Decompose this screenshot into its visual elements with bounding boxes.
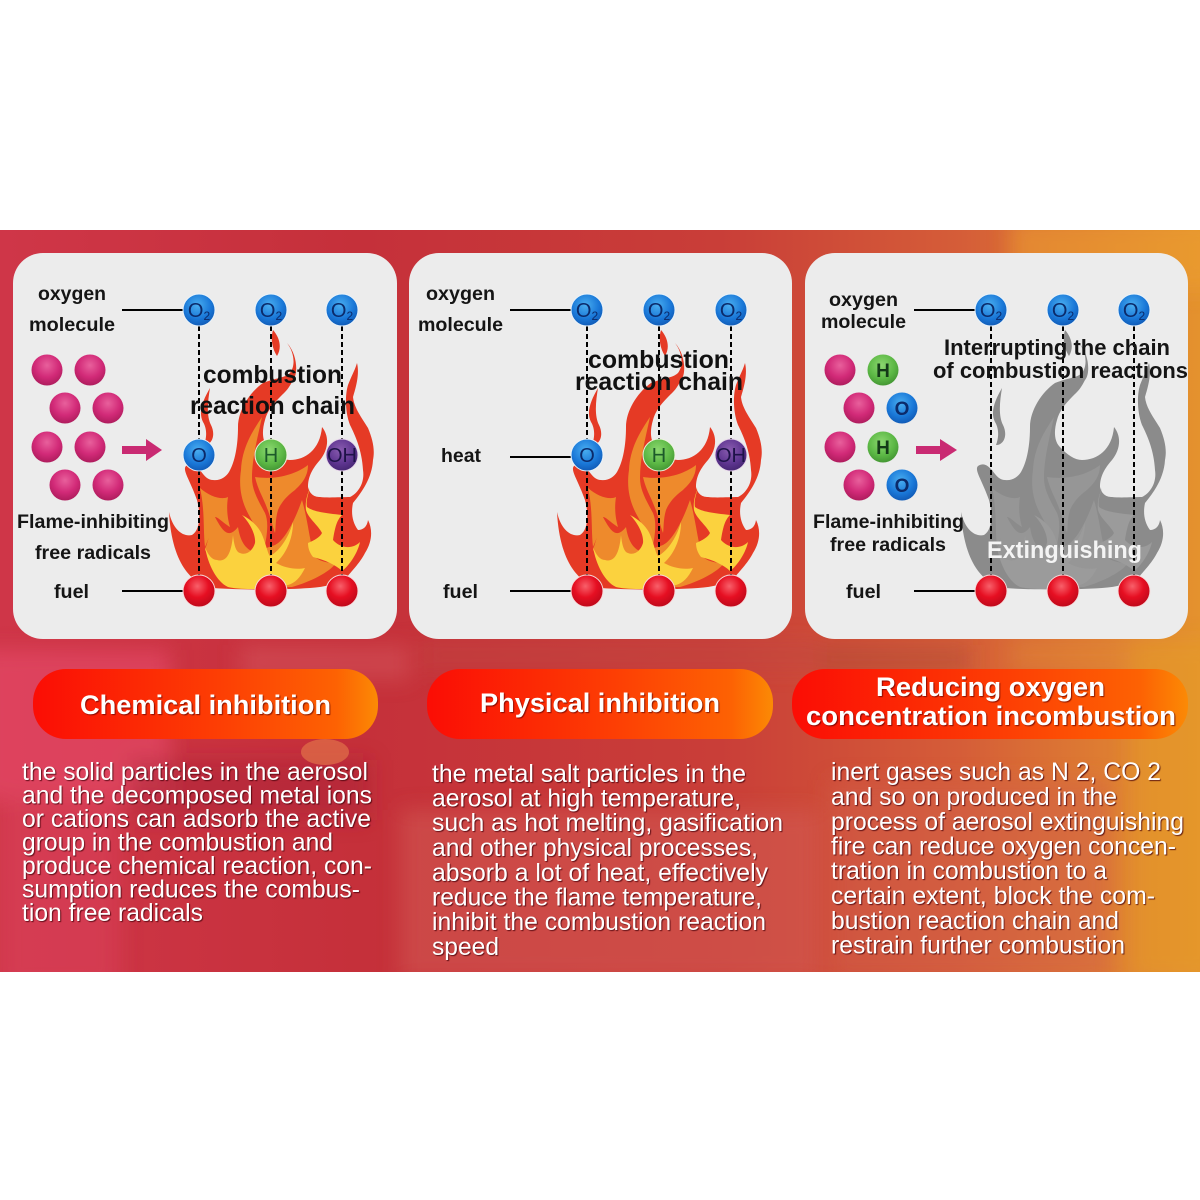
oxygen molecules: 2 bbox=[275, 309, 282, 323]
background band bbox=[0, 220, 1200, 990]
particles mix: O bbox=[895, 399, 909, 420]
pill: physical inhibition: Physical inhibition bbox=[480, 688, 720, 718]
oxygen molecules: O bbox=[720, 300, 735, 322]
oxygen molecules bbox=[183, 294, 358, 326]
label: oxygen molecule: molecule bbox=[29, 315, 115, 336]
dashed reaction chain lines bbox=[991, 326, 1134, 577]
heading: interrupting the chain: of combustion reactions bbox=[933, 358, 1188, 383]
text: reducing oxygen description: bustion reaction chain and bbox=[831, 907, 1119, 935]
active groups O H OH: O bbox=[191, 445, 207, 467]
oxygen molecules: 2 bbox=[995, 309, 1002, 323]
panel card bbox=[409, 253, 792, 639]
heading: combustion reaction chain bbox=[190, 361, 355, 420]
oxygen molecules: O bbox=[188, 300, 203, 322]
arrow bbox=[916, 439, 957, 461]
label lines bbox=[122, 310, 184, 591]
label: flame-inhibiting free radicals bbox=[813, 512, 964, 556]
oxygen molecules: 2 bbox=[203, 309, 210, 323]
label: flame-inhibiting free radicals bbox=[17, 512, 169, 564]
label: flame-inhibiting free radicals: Flame-inhibiting bbox=[813, 512, 964, 533]
dashed reaction chain lines bbox=[587, 326, 731, 577]
arrow bbox=[122, 439, 162, 461]
pill: reducing oxygen concentration bbox=[792, 669, 1188, 739]
heading: combustion reaction chain: combustion bbox=[588, 346, 729, 374]
text: chemical inhibition description: group in the combustion and bbox=[22, 828, 333, 856]
text: chemical inhibition description: the solid particles in the aerosol bbox=[22, 758, 368, 786]
label: oxygen molecule bbox=[821, 290, 906, 333]
text: reducing oxygen description: restrain further combustion bbox=[831, 932, 1125, 960]
oxygen molecules: O bbox=[1123, 300, 1138, 322]
heading: combustion reaction chain bbox=[575, 346, 743, 396]
panel card bbox=[13, 253, 397, 639]
oxygen molecules: O bbox=[980, 300, 995, 322]
active groups O H OH: O bbox=[579, 445, 595, 467]
oxygen molecules: O bbox=[1052, 300, 1067, 322]
particles mix bbox=[824, 354, 918, 500]
label lines bbox=[914, 310, 975, 591]
dashed reaction chain lines bbox=[199, 326, 342, 577]
text: physical inhibition description: and other physical processes, bbox=[432, 834, 758, 862]
text: reducing oxygen description: certain extent, block the com- bbox=[831, 882, 1155, 910]
text: physical inhibition description bbox=[432, 760, 783, 961]
active groups O H OH: OH bbox=[716, 445, 746, 467]
label: flame-inhibiting free radicals: free radicals bbox=[830, 535, 946, 556]
label: oxygen molecule: molecule bbox=[821, 312, 906, 333]
label: oxygen molecule: oxygen bbox=[426, 284, 495, 305]
text: reducing oxygen description bbox=[831, 758, 1184, 960]
fuel particles bbox=[571, 575, 747, 607]
label: oxygen molecule bbox=[29, 284, 115, 336]
heading: combustion reaction chain: reaction chain bbox=[575, 368, 743, 396]
text: physical inhibition description: the metal salt particles in the bbox=[432, 760, 746, 788]
label: flame-inhibiting free radicals: free radicals bbox=[35, 543, 151, 564]
flame bbox=[557, 330, 762, 590]
oxygen molecules: 2 bbox=[346, 309, 353, 323]
text: physical inhibition description: such as hot melting, gasification bbox=[432, 809, 783, 837]
text: physical inhibition description: absorb a lot of heat, effectively bbox=[432, 859, 768, 887]
text: reducing oxygen description: process of aerosol extinguishing bbox=[831, 808, 1184, 836]
oxygen molecules bbox=[975, 294, 1150, 326]
active groups O H OH: H bbox=[652, 445, 666, 467]
heading: combustion reaction chain: reaction chain bbox=[190, 392, 355, 420]
heading: interrupting the chain: Interrupting the chain bbox=[944, 335, 1170, 360]
oxygen molecules: O bbox=[260, 300, 275, 322]
oxygen molecules bbox=[571, 294, 747, 326]
text: chemical inhibition description: produce chemical reaction, con- bbox=[22, 852, 372, 880]
label: extinguishing: Extinguishing bbox=[987, 537, 1142, 564]
label: flame-inhibiting free radicals: Flame-inhibiting bbox=[17, 512, 169, 533]
text: reducing oxygen description: and so on produced in the bbox=[831, 783, 1117, 811]
oxygen molecules: 2 bbox=[1067, 309, 1074, 323]
label: fuel: fuel bbox=[54, 582, 89, 603]
oxygen molecules: O bbox=[331, 300, 346, 322]
label lines bbox=[510, 310, 572, 591]
particles mix: H bbox=[876, 438, 890, 459]
oxygen molecules: 2 bbox=[735, 309, 742, 323]
pill: chemical inhibition bbox=[33, 669, 378, 739]
text: physical inhibition description: reduce the flame temperature, bbox=[432, 884, 762, 912]
heading: combustion reaction chain: combustion bbox=[203, 361, 342, 389]
label: oxygen molecule: molecule bbox=[418, 315, 503, 336]
label: oxygen molecule: oxygen bbox=[38, 284, 106, 305]
text: reducing oxygen description: fire can reduce oxygen concen- bbox=[831, 832, 1176, 860]
particles mix: H bbox=[876, 361, 890, 382]
panel card bbox=[805, 253, 1188, 639]
text: chemical inhibition description: or cations can adsorb the active bbox=[22, 805, 371, 833]
active groups O H OH: H bbox=[264, 445, 278, 467]
panel: reducing oxygen diagram bbox=[805, 253, 1188, 639]
label: fuel: fuel bbox=[443, 582, 478, 603]
label: heat: heat bbox=[441, 446, 482, 467]
label: oxygen molecule bbox=[418, 284, 503, 336]
label: oxygen molecule: oxygen bbox=[829, 290, 898, 311]
oxygen molecules: 2 bbox=[1138, 309, 1145, 323]
fuel particles bbox=[975, 575, 1150, 607]
panel: physical inhibition diagram bbox=[409, 253, 792, 639]
pill: chemical inhibition: Chemical inhibition bbox=[80, 690, 331, 720]
text: reducing oxygen description: inert gases such as N 2, CO 2 bbox=[831, 758, 1161, 786]
text: physical inhibition description: aerosol at high temperature, bbox=[432, 784, 741, 812]
panel: chemical inhibition diagram bbox=[13, 253, 397, 639]
oxygen molecules: 2 bbox=[591, 309, 598, 323]
active groups O H OH bbox=[183, 439, 358, 471]
text: reducing oxygen description: tration in combustion to a bbox=[831, 857, 1107, 885]
text: chemical inhibition description: and the decomposed metal ions bbox=[22, 782, 372, 810]
grey extinguished flame bbox=[961, 330, 1166, 590]
oxygen molecules: O bbox=[576, 300, 591, 322]
oxygen molecules: 2 bbox=[663, 309, 670, 323]
pill: reducing oxygen concentration: Reducing oxygen bbox=[876, 672, 1105, 702]
oxygen molecules: O bbox=[648, 300, 663, 322]
free radical particles bbox=[32, 354, 124, 500]
active groups O H OH: OH bbox=[327, 445, 357, 467]
text: physical inhibition description: speed bbox=[432, 933, 499, 961]
heading: interrupting the chain bbox=[933, 335, 1188, 383]
text: physical inhibition description: inhibit the combustion reaction bbox=[432, 908, 766, 936]
label: fuel: fuel bbox=[846, 582, 881, 603]
particles mix: O bbox=[895, 476, 909, 497]
pill: physical inhibition bbox=[427, 669, 773, 739]
text: chemical inhibition description bbox=[22, 758, 372, 927]
text: chemical inhibition description: sumption reduces the combus- bbox=[22, 876, 360, 904]
flame bbox=[169, 330, 374, 590]
text: chemical inhibition description: tion free radicals bbox=[22, 899, 203, 927]
fuel particles bbox=[183, 575, 358, 607]
pill: reducing oxygen concentration: concentration incombustion bbox=[806, 701, 1176, 731]
active groups O H OH bbox=[571, 439, 747, 471]
